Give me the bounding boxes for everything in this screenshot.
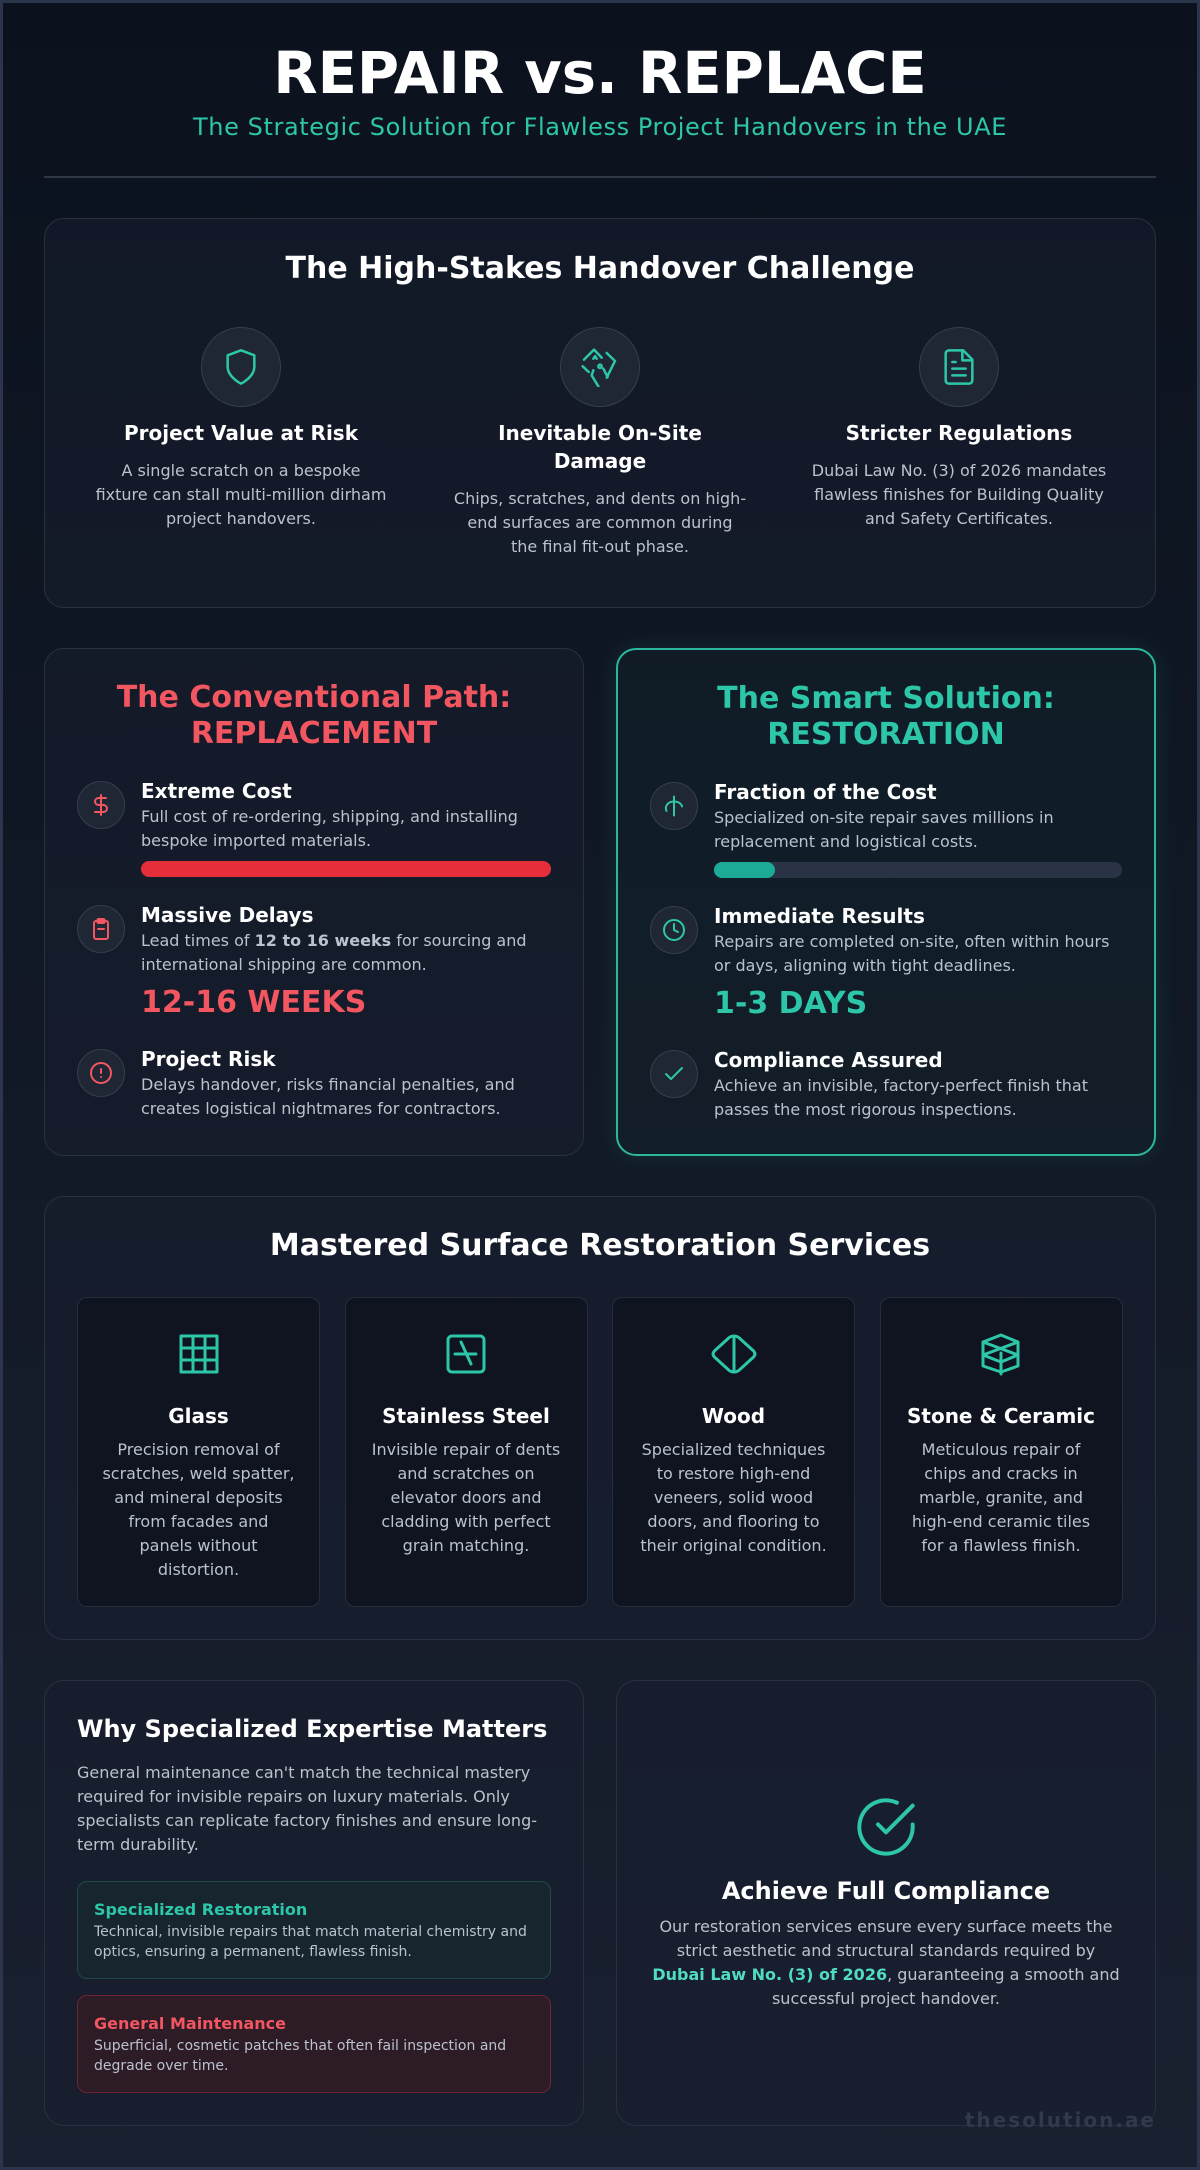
text: damage description: end surfaces are common during [467,513,733,532]
text: extreme cost description: Full cost of re-ordering, shipping, and installing [141,806,518,826]
text: stone description: marble, granite, and [919,1488,1083,1507]
text: fraction description [714,808,1054,850]
icon: cracked surface [560,327,640,407]
icon: clock [650,906,698,954]
heading: smart solution: The Smart Solution: [717,680,1055,716]
item: fraction of the cost [650,780,1122,878]
item: compliance assured [650,1048,1088,1118]
text: project value description [96,461,386,528]
heading: massive delays: Massive Delays [141,903,313,927]
text: glass description: from facades and [129,1512,268,1531]
text: compliance statement: strict aesthetic and structural standards required by [677,1940,1095,1960]
stat: 12-16 weeks: 12-16 WEEKS [141,984,366,1020]
icon: wood diamond [712,1334,756,1374]
text: wood description [640,1440,827,1555]
text: expertise description: General maintenance can't match the technical mastery [77,1762,530,1782]
heading: immediate results: Immediate Results [714,904,925,928]
card: glass [77,1297,320,1607]
title: REPAIR vs. REPLACE [273,40,927,107]
text: project value description: fixture can stall multi-million dirham [96,485,386,504]
text: project value description: A single scratch on a bespoke [121,461,361,480]
text: compliance description: Achieve an invisible, factory-perfect finish that [714,1076,1088,1094]
text: glass description: panels without [140,1536,257,1555]
text: compliance statement [652,1916,1120,2008]
bar: replacement cost full [141,861,551,877]
text: glass description: distortion. [158,1560,239,1579]
icon: check circle [857,1798,915,1856]
text: expertise description [77,1762,537,1854]
text: stone description [912,1440,1090,1555]
text: damage description: the final fit-out phase. [511,537,689,556]
icon: check [650,1050,698,1098]
text: general maintenance description: Superficial, cosmetic patches that often fail inspection and [94,2038,506,2054]
heading: compliance assured: Compliance Assured [714,1048,943,1072]
panel: why specialized expertise matters [44,1680,584,2126]
heading: conventional path: REPLACEMENT [191,716,437,751]
callout: specialized restoration [77,1881,551,1979]
heading: stainless steel: Stainless Steel [382,1404,550,1428]
heading: conventional path: The Conventional Path: [117,680,511,714]
text: regulations description: flawless finishes for Building Quality [814,485,1104,504]
text: immediate results description [714,932,1109,974]
text: delays description: international shipping are common. [141,954,427,974]
text: extreme cost description [141,806,518,850]
icon: alert [77,1049,125,1097]
text: specialized restoration description: Technical, invisible repairs that match material chemistry and [94,1924,527,1940]
card: stainless steel [344,1297,588,1607]
heading: challenge: The High-Stakes Handover Challenge [286,251,914,286]
heading: general maintenance: General Maintenance [94,2014,286,2033]
text: immediate results description: Repairs are completed on-site, often within hours [714,932,1109,950]
text: compliance statement: successful project handover. [772,1988,1000,2008]
challenge: project value at risk [96,327,386,528]
heading: extreme cost: Extreme Cost [141,779,292,803]
text: wood description: veneers, solid wood [654,1488,813,1507]
text: expertise description: term durability. [77,1834,199,1854]
text: general maintenance description: degrade over time. [94,2058,228,2074]
heading: inevitable on-site damage: Damage [554,449,646,473]
text: compliance statement: Dubai Law No. (3) of 2026, guaranteeing a smooth and [652,1964,1120,1984]
item: project risk [77,1047,515,1118]
heading: project risk: Project Risk [141,1047,276,1071]
heading: project value at risk: Project Value at Risk [124,421,358,445]
text: wood description: their original condition. [640,1536,827,1555]
text: general maintenance description [94,2038,506,2074]
heading: stricter regulations: Stricter Regulations [846,421,1072,445]
text: immediate results description: or days, aligning with tight deadlines. [714,956,1016,974]
text: expertise description: specialists can replicate factory finishes and ensure long- [77,1810,537,1830]
watermark: thesolution.ae [965,2108,1156,2132]
icon: clipboard [77,905,125,953]
text: wood description: doors, and flooring to [647,1512,820,1531]
text: damage description: Chips, scratches, and dents on high- [454,489,746,508]
heading: services: Mastered Surface Restoration Services [270,1228,930,1263]
text: stone description: chips and cracks in [924,1464,1078,1483]
panel: the high-stakes handover challenge [44,218,1156,608]
text: glass description: Precision removal of [117,1440,280,1459]
callout: general maintenance [77,1995,551,2093]
icon: fraction [650,782,698,830]
item: immediate results [650,904,1109,1020]
text: damage description [454,489,746,556]
text: steel description: Invisible repair of dents [372,1440,560,1459]
challenge: stricter regulations [812,327,1106,528]
text: steel description: grain matching. [403,1536,529,1555]
text: project risk description: Delays handover, risks financial penalties, and [141,1074,515,1094]
text: regulations description [812,461,1106,528]
text: regulations description: Dubai Law No. (3) of 2026 mandates [812,461,1106,480]
text: delays description [141,930,527,974]
text: project risk description [141,1074,515,1118]
card: wood [612,1297,855,1607]
text: steel description: and scratches on [397,1464,535,1483]
panel: achieve full compliance [616,1680,1156,2126]
heading: expertise: Why Specialized Expertise Matters [77,1714,547,1742]
text: project risk description: creates logistical nightmares for contractors. [141,1098,501,1118]
text: fraction description: replacement and logistical costs. [714,832,978,850]
text: wood description: Specialized techniques [642,1440,825,1459]
text: stone description: high-end ceramic tiles [912,1512,1090,1531]
heading: conventional path [116,680,511,751]
heading: stone and ceramic: Stone & Ceramic [907,1404,1095,1428]
icon: document [919,327,999,407]
panel: conventional path replacement [44,648,584,1156]
heading: smart solution [717,680,1055,752]
item: massive delays [77,903,527,1020]
heading: achieve full compliance: Achieve Full Compliance [722,1877,1050,1905]
heading: inevitable on-site damage [498,421,702,473]
text: wood description: to restore high-end [657,1464,810,1483]
panel: smart solution restoration [616,648,1156,1156]
heading: fraction of the cost: Fraction of the Cost [714,780,937,804]
heading: smart solution: RESTORATION [767,717,1005,752]
text: compliance statement: Our restoration services ensure every surface meets the [659,1916,1113,1936]
text: stone description: for a flawless finish. [921,1536,1081,1555]
text: steel description: cladding with perfect [381,1512,551,1531]
panel: restoration services [44,1196,1156,1640]
icon: steel panel [446,1334,486,1374]
heading: inevitable on-site damage: Inevitable On-Site [498,421,702,445]
icon: grid [180,1334,218,1374]
icon: shield [201,327,281,407]
text: delays description: Lead times of 12 to 16 weeks for sourcing and [141,930,527,950]
heading: glass: Glass [168,1404,229,1428]
text: specialized restoration description [94,1924,527,1960]
icon: dollar [77,781,125,829]
text: stone description: Meticulous repair of [922,1440,1080,1459]
text: fraction description: Specialized on-site repair saves millions in [714,808,1054,826]
text: glass description: and mineral deposits [114,1488,283,1507]
challenge: inevitable on-site damage [454,327,746,556]
heading: specialized restoration: Specialized Restoration [94,1900,307,1919]
text: regulations description: and Safety Certificates. [865,509,1053,528]
stat: 1-3 days: 1-3 DAYS [714,986,867,1020]
text: project value description: project handovers. [166,509,316,528]
subtitle: The Strategic Solution for Flawless Project Handovers in the UAE [193,113,1007,141]
text: specialized restoration description: optics, ensuring a permanent, flawless finish. [94,1944,412,1960]
text: extreme cost description: bespoke imported materials. [141,830,371,850]
text: compliance description [714,1076,1088,1118]
heading: wood: Wood [702,1404,765,1428]
text: steel description: elevator doors and [391,1488,541,1507]
text: glass description [102,1440,295,1579]
text: expertise description: required for invisible repairs on luxury materials. Only [77,1786,510,1806]
card: stone and ceramic [880,1297,1122,1607]
text: glass description: scratches, weld spatter, [102,1464,295,1483]
bar: restoration cost fraction [714,862,1122,878]
icon: stone block [982,1334,1020,1376]
text: steel description [372,1440,560,1555]
item: extreme cost [77,779,551,877]
text: compliance description: passes the most rigorous inspections. [714,1100,1017,1118]
